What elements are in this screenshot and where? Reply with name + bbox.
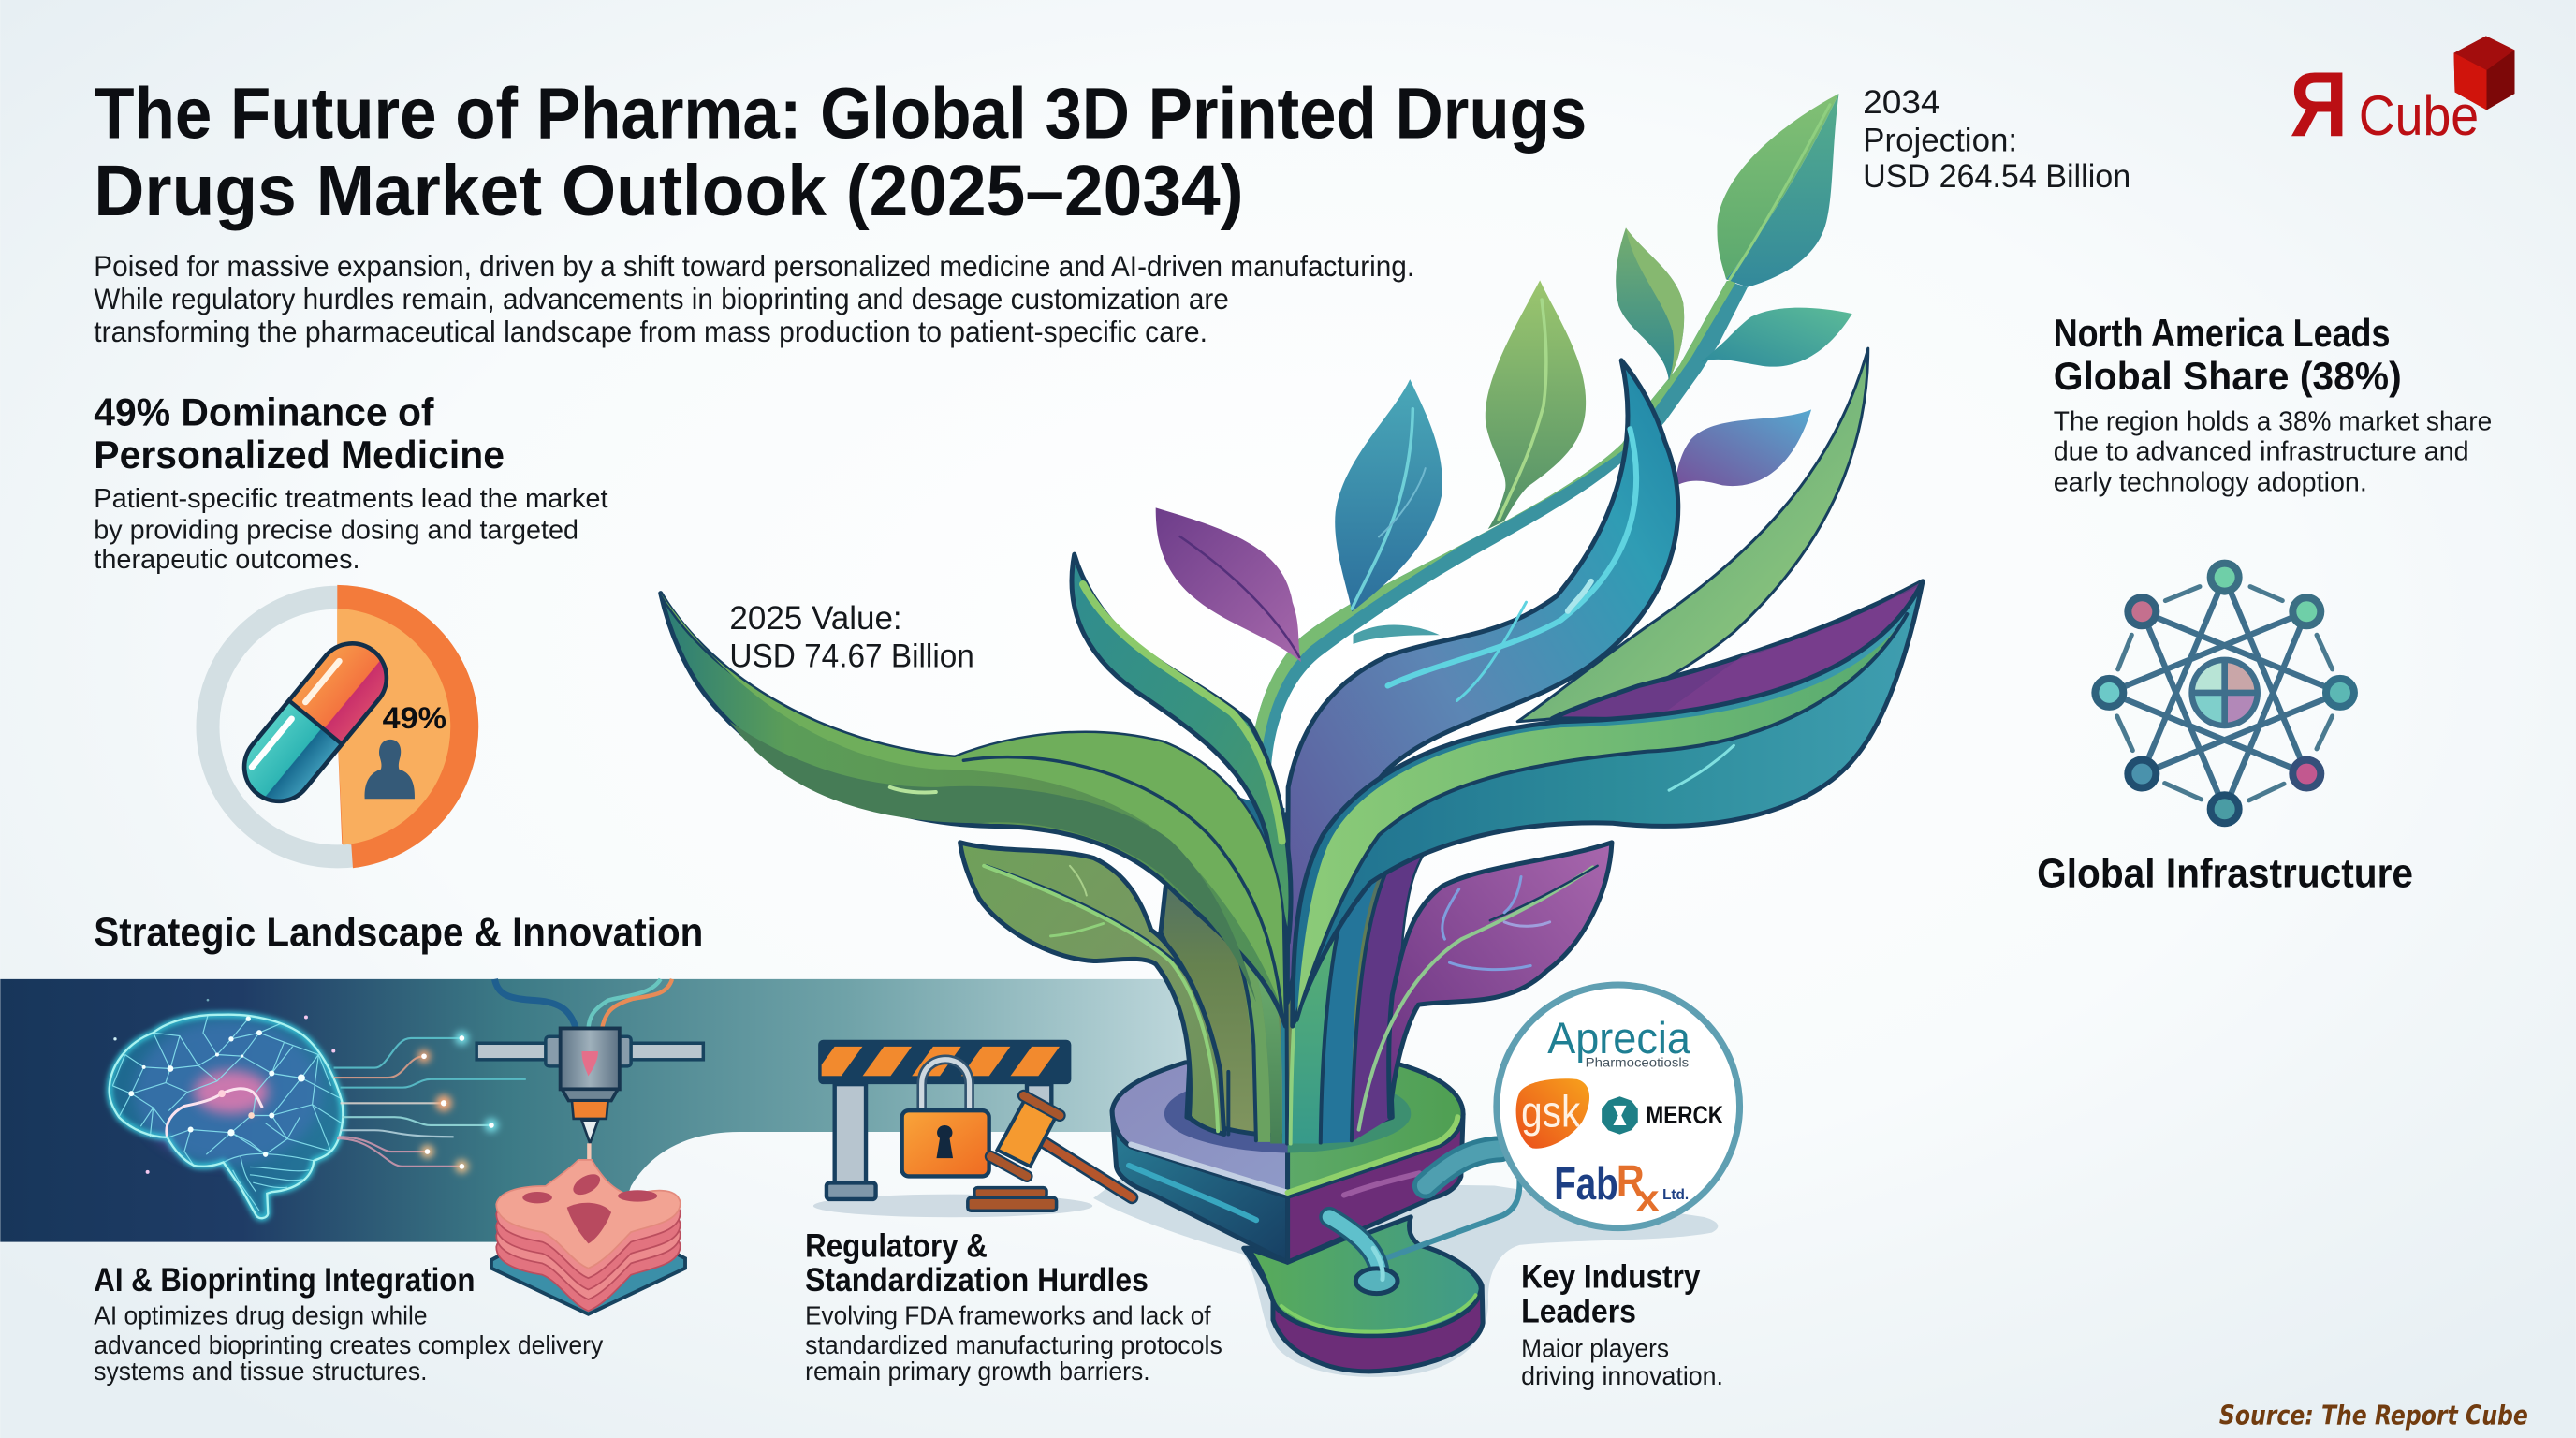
leaf: blue: [1335, 379, 1442, 611]
logo: RCube: Я: [2291, 52, 2348, 155]
leaf: teal right: [1701, 308, 1852, 367]
logo: FabRx: Ltd.: [1662, 1187, 1689, 1203]
logo: RCube: [2291, 36, 2514, 155]
panel: regulatory text: remain primary growth barriers.: [805, 1357, 1150, 1386]
connector tube to base: [1329, 1217, 1398, 1294]
logo: gsk: gsk: [1521, 1088, 1581, 1137]
network hub: [2192, 660, 2258, 726]
heading: Personalized Medicine: [94, 433, 505, 477]
panel: personalized medicine: [94, 389, 608, 868]
network nodes: [2095, 564, 2354, 823]
illustration: AI brain: [110, 999, 343, 1218]
panel: AI and bioprinting text: [94, 1262, 603, 1386]
top leaf: [1717, 94, 1839, 287]
brain network lines: [112, 1016, 342, 1211]
plant foliage: [661, 348, 1923, 1135]
small left leaf: [960, 843, 1224, 1135]
panel: North America: North America Leads: [2054, 311, 2390, 355]
main plant illustration: [661, 94, 1923, 1377]
panel: key industry leaders text: [1521, 1259, 1723, 1390]
logo: FabRx: x: [1636, 1179, 1660, 1219]
logo: Aprecia: Aprecia: [1547, 1014, 1691, 1064]
connector tube from circle to pot: [1426, 1149, 1500, 1186]
title: The Future of Pharma: Global 3D Printed Drugs: [94, 73, 1587, 154]
panel: regulatory text: Standardization Hurdles: [805, 1262, 1149, 1299]
brain glow outline: [110, 1015, 343, 1218]
panel: regulatory text: Evolving FDA frameworks and lack of: [805, 1300, 1211, 1329]
panel: regulatory text: standardized manufacturing protocols: [805, 1330, 1222, 1359]
panel: key industry leaders text: Key Industry: [1521, 1259, 1701, 1296]
section heading: strategic landscape: Strategic Landscape & Innovation: [94, 910, 703, 956]
leaf: blue purple right: [1675, 409, 1811, 487]
barrier legs: [827, 1084, 1051, 1199]
panel: key industry leaders logos: [1497, 985, 1740, 1228]
panel: North America: [2054, 311, 2492, 498]
body text: Patient-specific treatments lead the market: [94, 484, 608, 514]
panel: North America: early technology adoption.: [2054, 468, 2367, 498]
brain nodes: [128, 1017, 305, 1157]
central big leaf: [1287, 360, 1678, 1003]
plant base shadow: [1093, 1180, 1718, 1377]
panel: North America: The region holds a 38% market share: [2054, 407, 2492, 437]
heading: 49% Dominance of: [94, 389, 434, 433]
base stand: [1244, 1217, 1483, 1372]
2034 projection: 2034: [1863, 84, 1940, 121]
logo: RCube: Cube: [2359, 84, 2479, 147]
2025 value: USD 74.67 Billion: [729, 638, 974, 674]
network links: [2109, 578, 2340, 809]
logo: FabRx: Fab: [1554, 1159, 1618, 1210]
title: [94, 73, 1587, 231]
label: global infrastructure: Global Infrastructure: [2037, 851, 2413, 897]
lower side leaves: [960, 843, 1612, 1135]
icon: global infrastructure network: [2095, 564, 2354, 823]
icon: capsule: [230, 629, 401, 815]
heading: [94, 389, 505, 477]
big left leaf: [661, 594, 1285, 1026]
logo: Aprecia: Pharmoceotiosls: [1586, 1055, 1689, 1070]
back green leaf: [1517, 348, 1868, 722]
data lines from brain to printer: [334, 1032, 526, 1173]
intro text: [94, 249, 1414, 348]
gavel: [968, 1095, 1132, 1211]
right sweeping leaf: [1293, 581, 1923, 1026]
brain fissure: [167, 1089, 262, 1137]
strategic band background: [0, 979, 1208, 1242]
leaf: green center: [1486, 280, 1586, 529]
leaf: purple: [1156, 507, 1301, 662]
planter pot: [1112, 1063, 1463, 1262]
leaf: small upper green: [1616, 227, 1684, 381]
2025 value: [729, 600, 974, 674]
icon: regulatory barrier, lock and gavel: [813, 1040, 1132, 1217]
logo: gsk: [1516, 1078, 1589, 1149]
left mid leaf: [1072, 554, 1291, 943]
donut chart 49%: [208, 585, 478, 868]
panel: regulatory text: [805, 1227, 1222, 1386]
small right leaf: [1359, 843, 1612, 1130]
logo: Merck: MERCK: [1647, 1100, 1723, 1129]
2034 projection: Projection:: [1863, 122, 2017, 158]
panel: AI and bioprinting text: systems and tissue structures.: [94, 1357, 428, 1386]
intro text: transforming the pharmaceutical landscape from mass production to patient-specific care.: [94, 315, 1208, 348]
body text: [94, 484, 608, 575]
logo: FabRx: R: [1617, 1156, 1645, 1206]
logo: Merck: [1602, 1096, 1723, 1135]
stem silhouette: [1141, 796, 1442, 1136]
panel: regulatory text: Regulatory &: [805, 1227, 988, 1264]
stem bundle: [1141, 796, 1442, 1144]
2025 value: 2025 Value:: [729, 600, 902, 637]
body text: therapeutic outcomes.: [94, 545, 360, 575]
icon: patient silhouette: [365, 740, 415, 799]
stem strips: [1141, 796, 1270, 1142]
icon: printed tissue: [491, 1160, 685, 1314]
panel: AI and bioprinting text: AI optimizes drug design while: [94, 1300, 428, 1329]
panel: key industry leaders text: Maior players: [1521, 1333, 1669, 1362]
panel: AI and bioprinting text: AI & Bioprinting Integration: [94, 1262, 475, 1299]
stem outlines: [1141, 796, 1433, 1144]
body text: by providing precise dosing and targeted: [94, 516, 578, 546]
2034 projection: USD 264.54 Billion: [1863, 158, 2130, 195]
icon: bioprinter head: [476, 979, 703, 1163]
panel: North America: Global Share (38%): [2054, 354, 2402, 398]
intro text: Poised for massive expansion, driven by a shift toward personalized medicine and AI-driven manufacturing.: [94, 249, 1414, 283]
intro text: While regulatory hurdles remain, advancements in bioprinting and desage customization are: [94, 282, 1229, 315]
vine: [1250, 281, 1748, 765]
branch stub: [1354, 624, 1440, 644]
2034 projection: [1863, 84, 2130, 195]
panel: AI and bioprinting text: advanced bioprinting creates complex delivery: [94, 1330, 603, 1359]
donut chart 49%: 49%: [383, 700, 446, 735]
panel: key industry leaders text: driving innovation.: [1521, 1361, 1723, 1390]
purple back leaf: [1552, 581, 1923, 722]
logo: FabRx: [1554, 1156, 1689, 1219]
background stars: [113, 999, 335, 1174]
barrier bar: [813, 1040, 1071, 1084]
padlock: [902, 1060, 989, 1176]
upper branch leaves: [1250, 94, 1852, 765]
panel: North America: due to advanced infrastructure and: [2054, 436, 2469, 466]
connector tubes: [1388, 1180, 1519, 1257]
panel: key industry leaders text: Leaders: [1521, 1294, 1636, 1330]
brain outline: [110, 1015, 343, 1218]
title: Drugs Market Outlook (2025–2034): [94, 151, 1244, 231]
